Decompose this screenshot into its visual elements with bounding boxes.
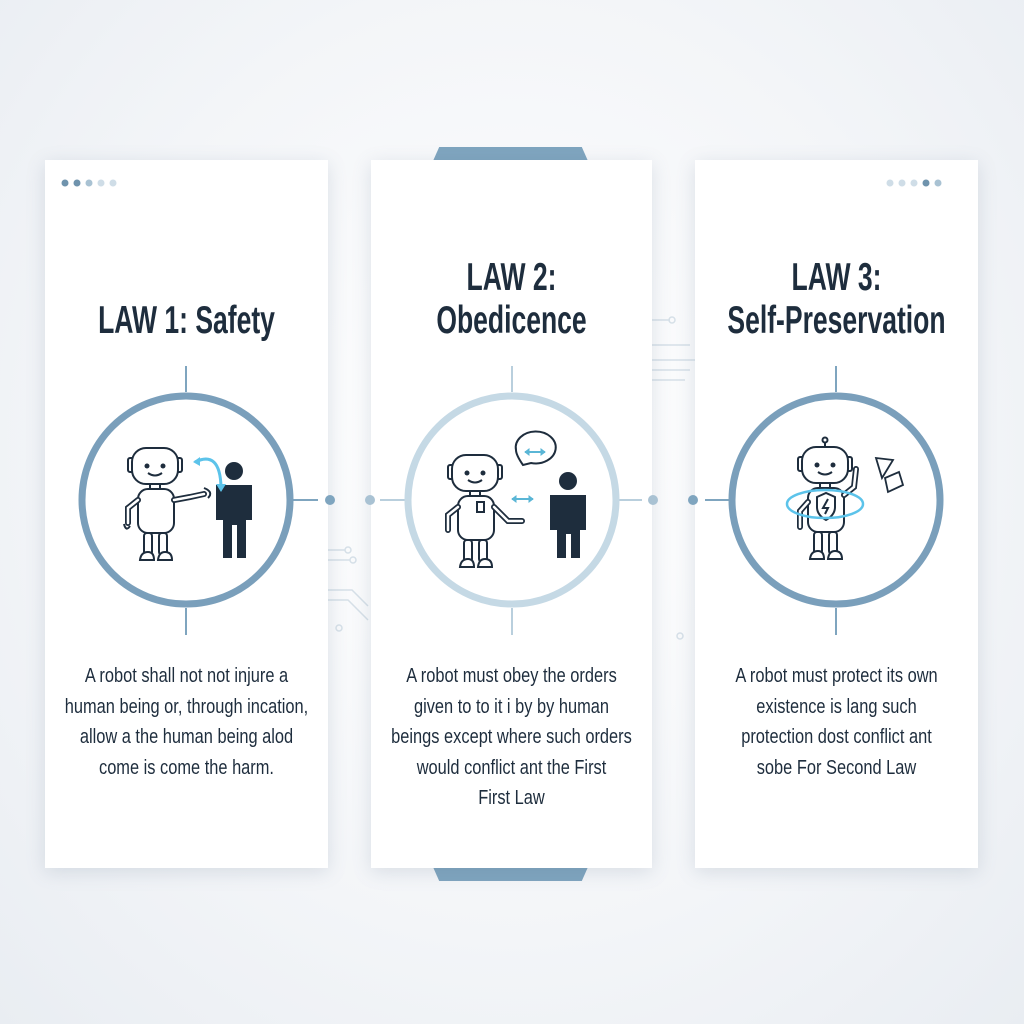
progress dots (886, 180, 942, 186)
body text: beings except where such orders (391, 726, 632, 748)
icon: robot, speech bubble and human (law 2) (448, 431, 586, 567)
body text: would conflict ant the First (417, 756, 606, 778)
icon: robot and human (law 1) (124, 448, 252, 560)
circle: law 2 (408, 396, 616, 604)
heading: LAW 2: (467, 256, 556, 299)
circle: law 3 (732, 396, 940, 604)
body text (735, 665, 938, 778)
progress dots (62, 180, 116, 186)
body text: protection dost conflict ant (741, 726, 932, 748)
panel: law 3 (695, 160, 978, 868)
icon: shielded robot (law 3) (787, 438, 903, 559)
panel: law 2 (371, 160, 652, 868)
body text: A robot must protect its own (735, 665, 938, 687)
heading (436, 256, 587, 342)
heading (727, 256, 946, 342)
top tab of middle panel (433, 147, 588, 161)
body text: First Law (478, 787, 545, 809)
circle: law 1 (82, 396, 290, 604)
body text: human being or, through incation, (65, 696, 308, 718)
connectors (186, 366, 836, 635)
body text: A robot must obey the orders (406, 665, 617, 687)
bottom tab of middle panel (433, 867, 588, 881)
heading: Self-Preservation (727, 299, 946, 342)
heading: LAW 3: (792, 256, 881, 299)
heading: Obedicence (436, 299, 587, 342)
body text: existence is lang such (756, 696, 917, 718)
panel: law 1 (45, 160, 328, 868)
body text (65, 665, 308, 778)
body text (391, 665, 632, 809)
body text: allow a the human being alod (80, 726, 293, 748)
heading: LAW 1: Safety (98, 299, 275, 342)
body text: come is come the harm. (99, 756, 274, 778)
body text: A robot shall not not injure a (85, 665, 288, 687)
body text: given to to it i by by human (414, 696, 609, 718)
body text: sobe For Second Law (757, 756, 916, 778)
